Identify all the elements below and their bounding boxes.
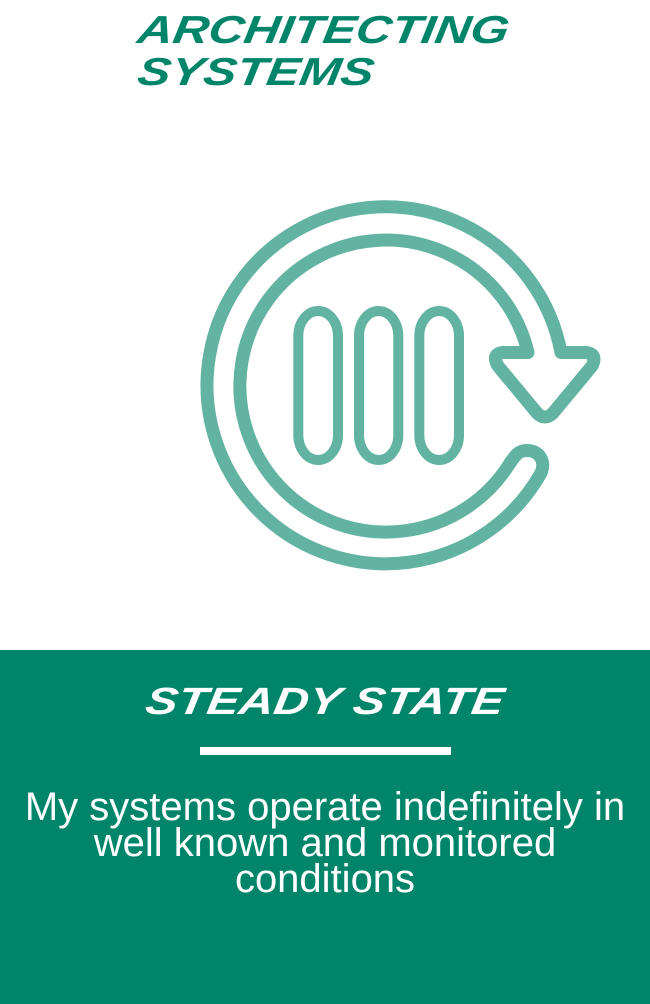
body text: conditions [235,857,415,901]
body text: My systems operate indefinitely in [25,785,625,829]
title [133,8,513,94]
panel: steady state [0,650,650,1004]
panel heading: STEADY STATE [143,680,509,723]
bar 3 [419,311,459,460]
circular arrow [207,207,594,564]
body text [25,785,625,901]
title: ARCHITECTING [133,8,513,52]
icon: circular arrow around three bars [200,200,600,570]
bar 2 [359,311,398,460]
bar 1 [298,311,338,460]
body text: well known and monitored [94,821,556,865]
title: SYSTEMS [135,50,378,94]
divider bar [200,747,451,755]
